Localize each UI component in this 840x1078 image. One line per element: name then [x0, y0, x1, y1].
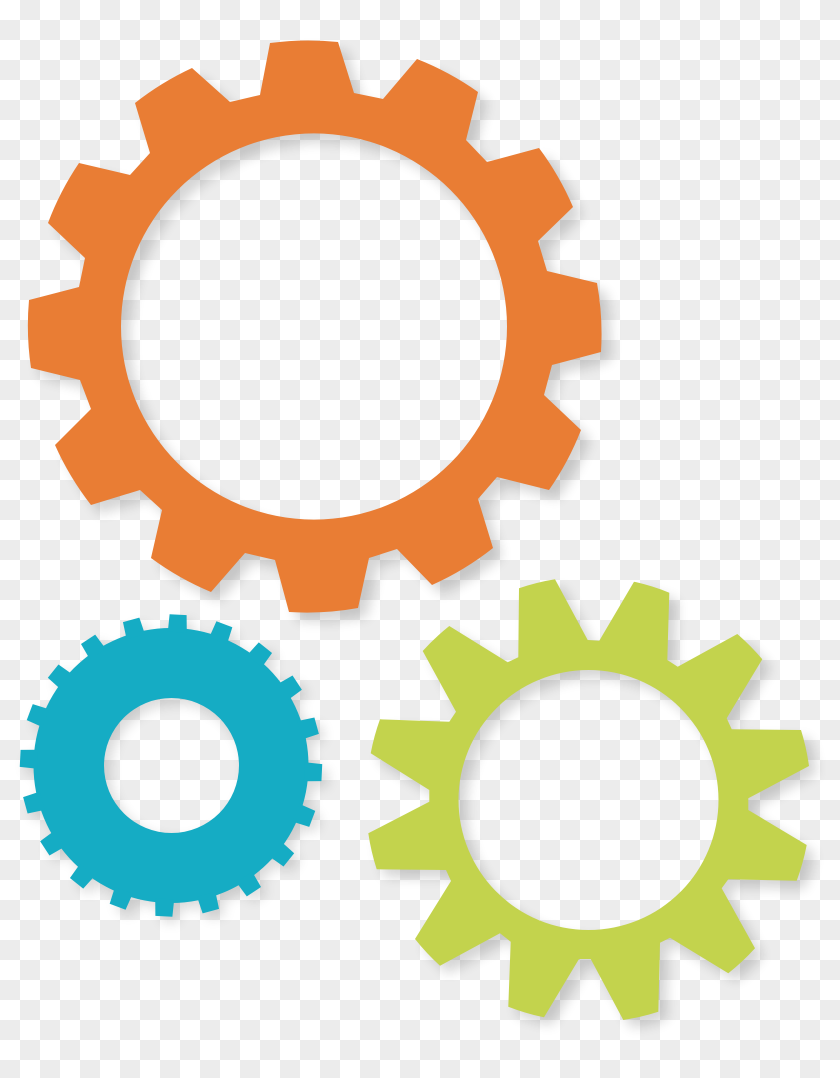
icon: green gear	[368, 579, 817, 1028]
orange gear shadow	[37, 49, 611, 622]
teal gear shadow	[19, 614, 335, 929]
orange gear body	[28, 40, 602, 613]
icon: teal gear	[13, 608, 335, 929]
teal gear body	[13, 608, 329, 923]
green gear shadow	[376, 587, 817, 1028]
icon: orange gear	[28, 40, 611, 622]
green gear body	[368, 579, 809, 1020]
